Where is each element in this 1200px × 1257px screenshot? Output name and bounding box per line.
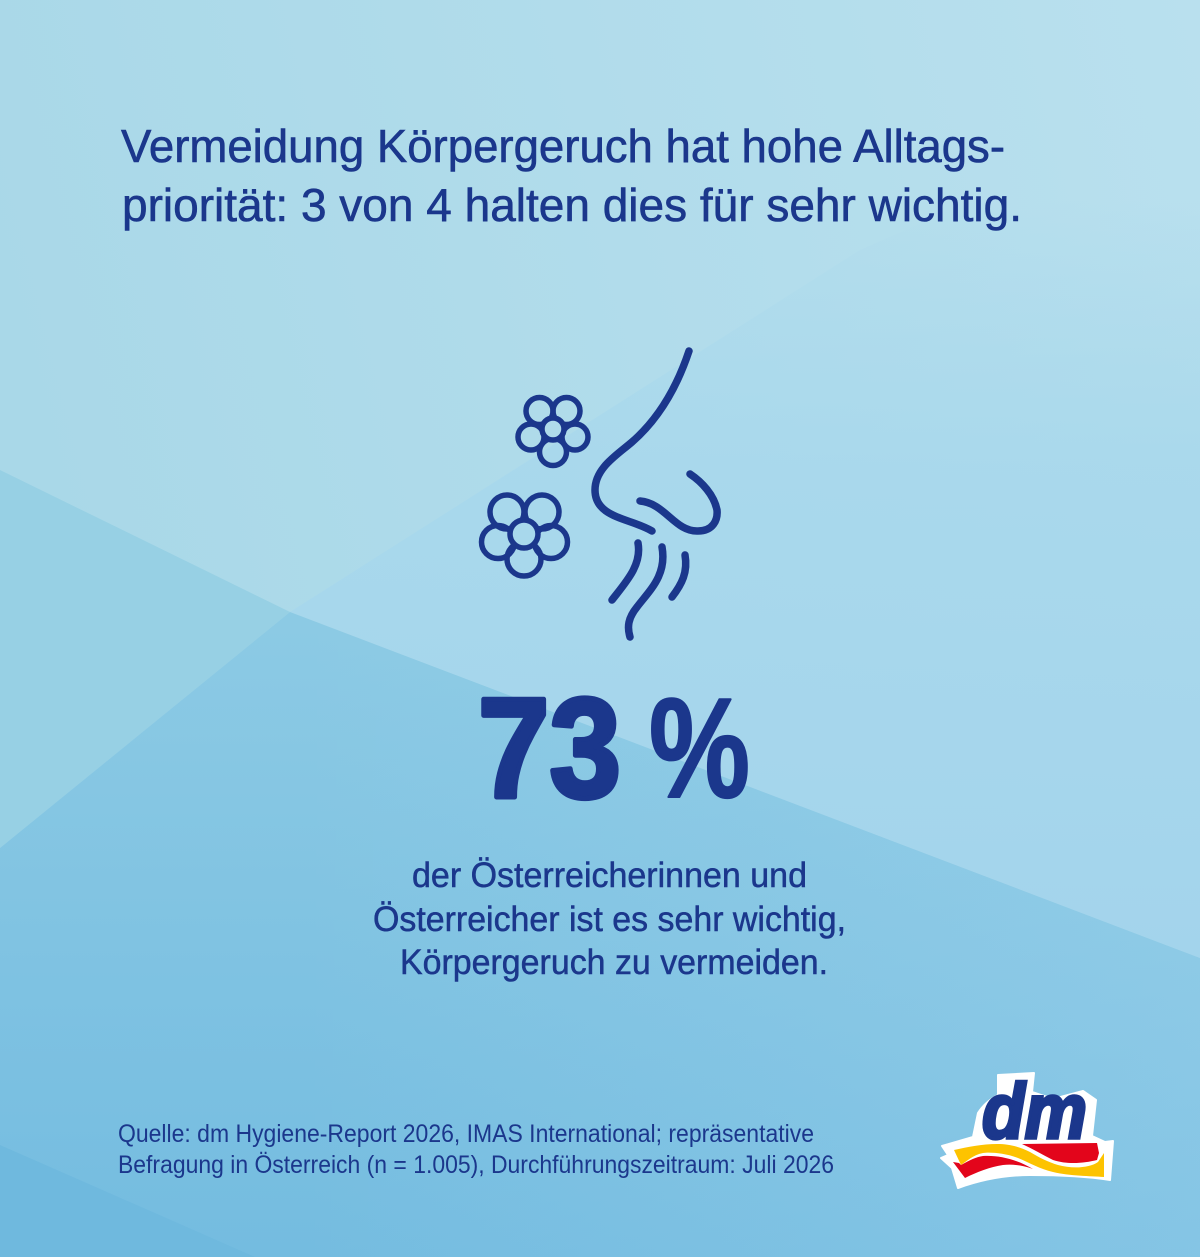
description text (373, 856, 846, 982)
icon: nostril (640, 474, 717, 531)
big number 73 % (478, 669, 750, 828)
title: Vermeidung Körpergeruch hat hohe Alltags- (121, 120, 1005, 172)
logo: dm: dm (982, 1067, 1087, 1155)
description text: der Österreicherinnen und (412, 856, 807, 895)
icon: upper flower (518, 398, 588, 466)
description text: Österreicher ist es sehr wichtig, (373, 900, 846, 939)
title (121, 120, 1022, 231)
big number 73 %: % (649, 669, 750, 828)
source note (118, 1120, 834, 1179)
icon: nose with flowers (482, 351, 717, 637)
description text: Körpergeruch zu vermeiden. (400, 943, 828, 982)
icon: scent lines (612, 543, 686, 637)
logo: dm (941, 1067, 1113, 1188)
title: priorität: 3 von 4 halten dies für sehr wichtig. (122, 179, 1022, 231)
icon: lower flower (482, 495, 568, 576)
big number 73 %: 73 (478, 669, 621, 828)
source note: Quelle: dm Hygiene-Report 2026, IMAS International; repräsentative (118, 1120, 814, 1148)
source note: Befragung in Österreich (n = 1.005), Durchführungszeitraum: Juli 2026 (118, 1151, 834, 1179)
icon: nose outline (595, 351, 689, 531)
